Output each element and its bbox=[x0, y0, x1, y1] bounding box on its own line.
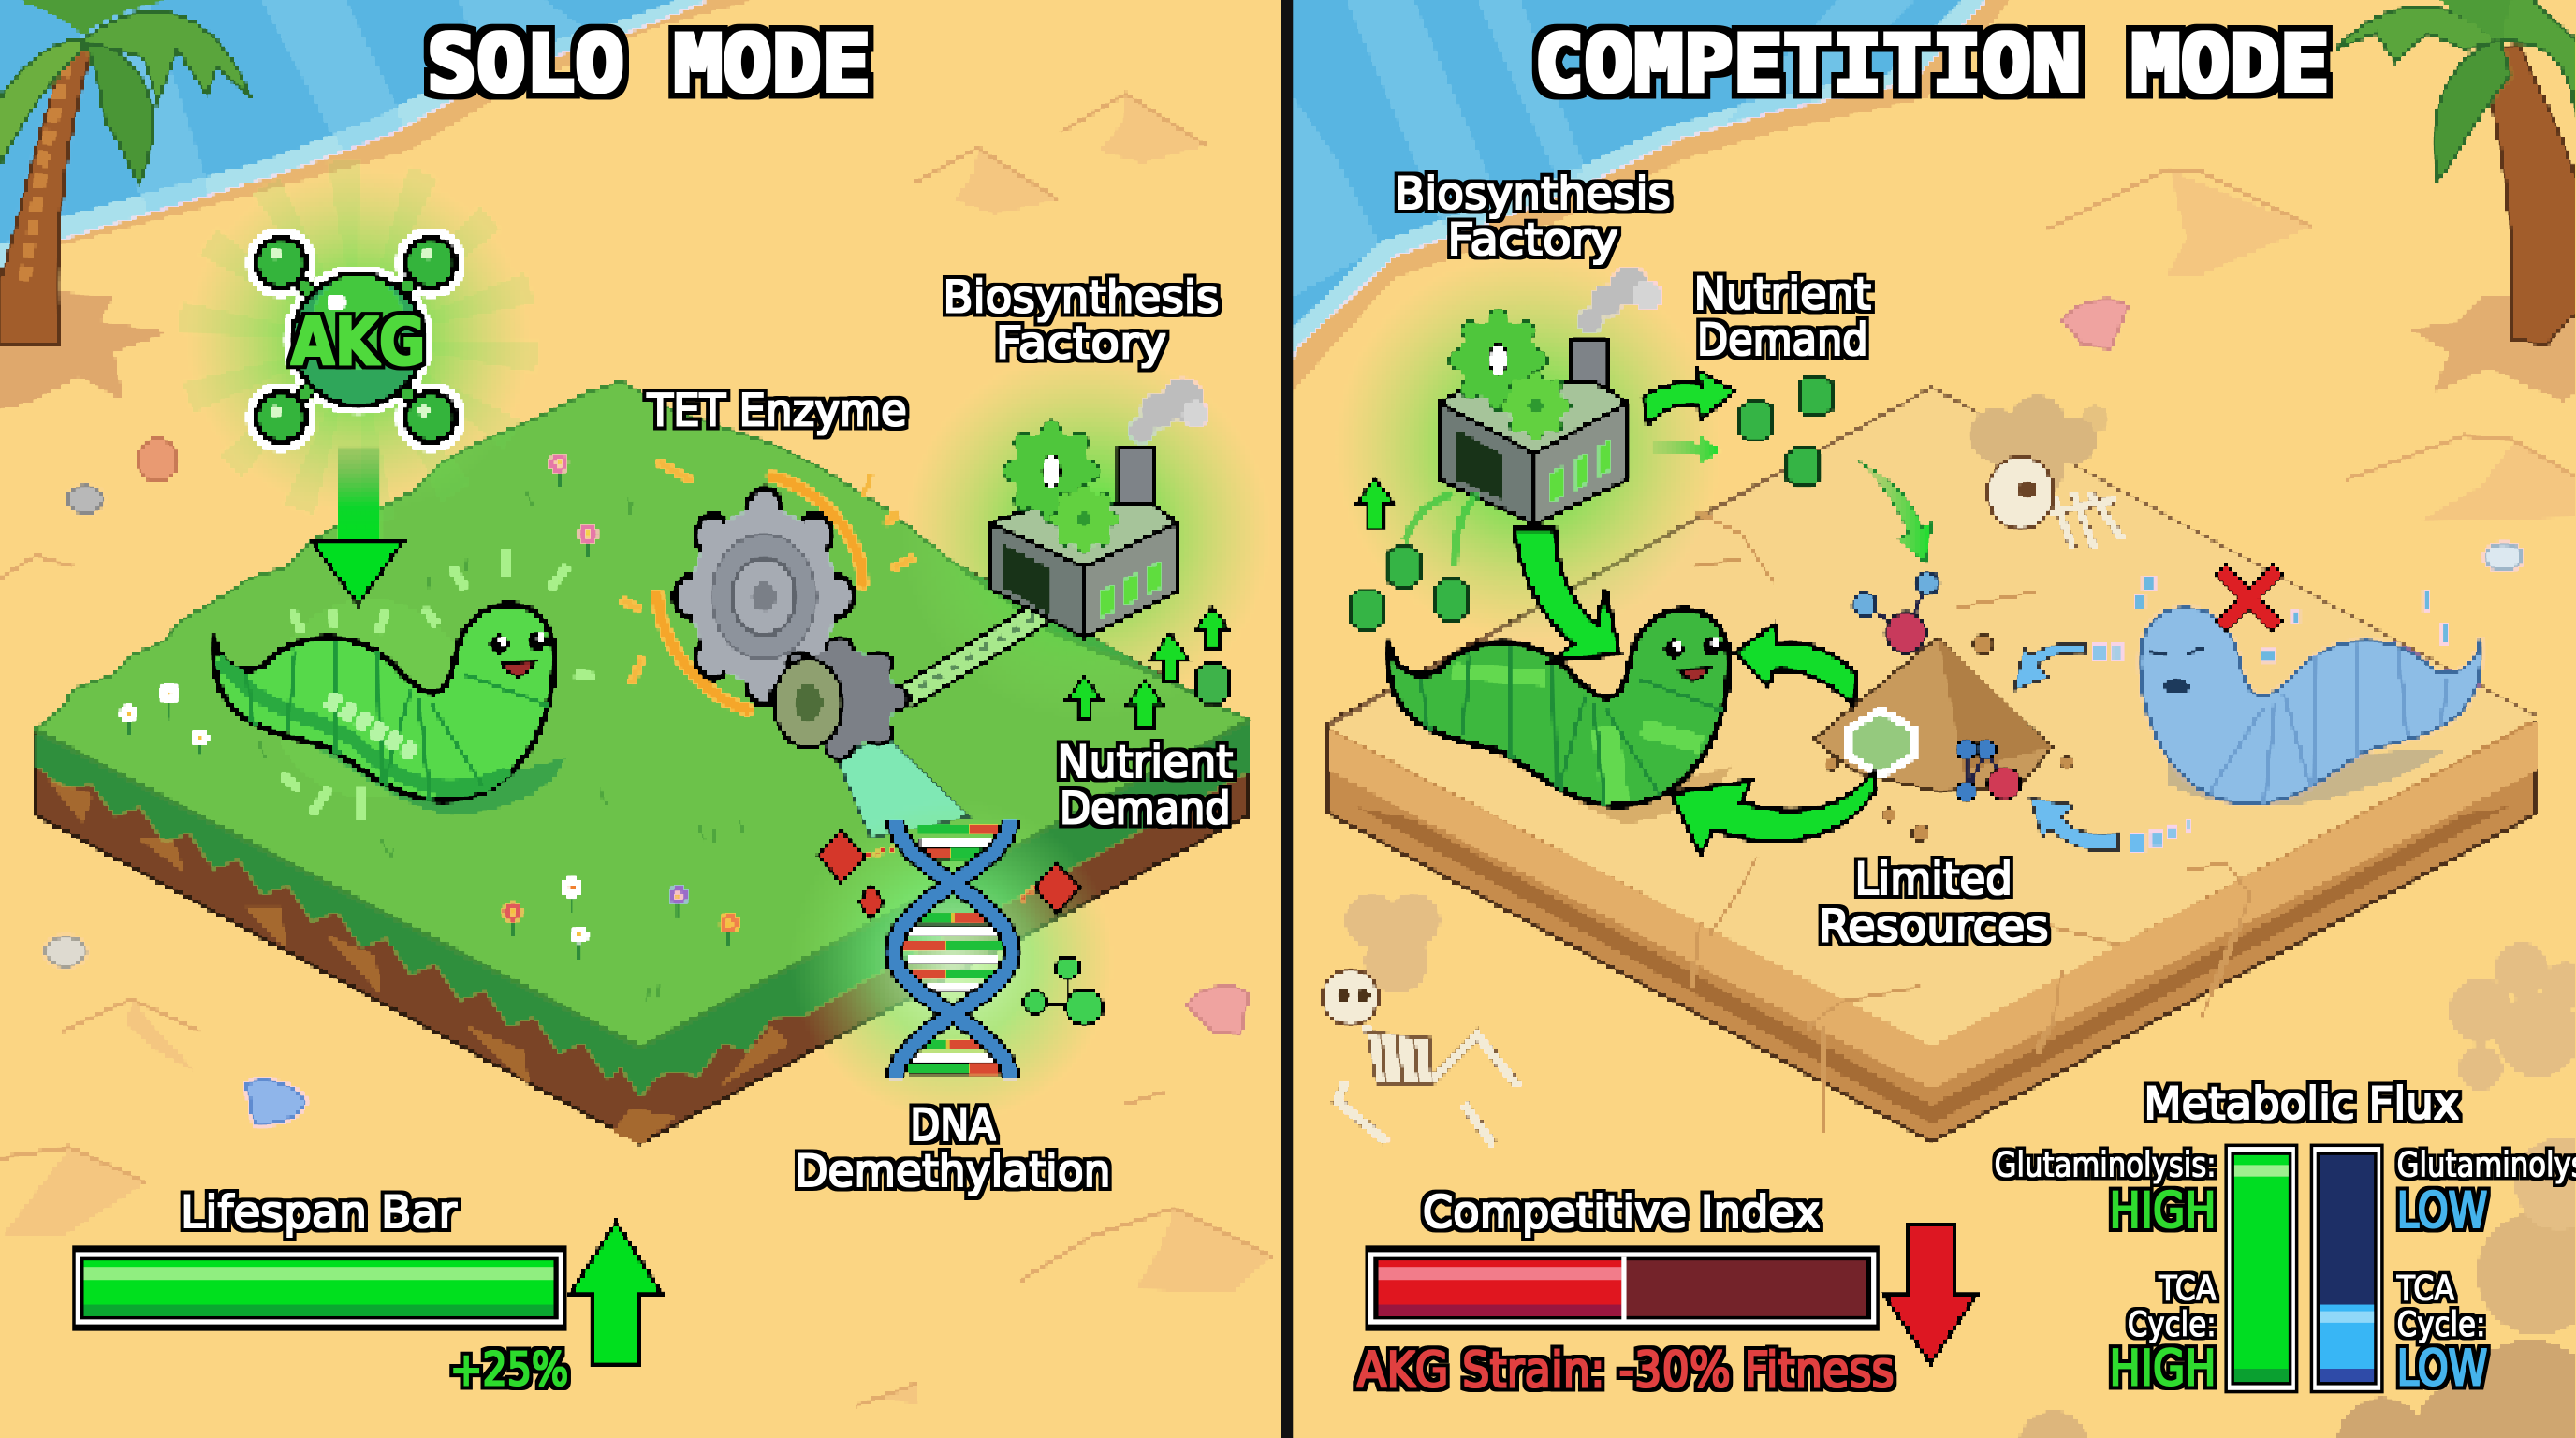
X mark bbox=[2226, 575, 2272, 621]
palm shadow, right bbox=[2407, 296, 2576, 403]
weak blue worm bbox=[2140, 608, 2481, 809]
label: nutrient demand bbox=[1057, 737, 1233, 834]
rib cage bbox=[1367, 1032, 1432, 1084]
AKG glow bbox=[185, 168, 531, 513]
dust clouds, background bbox=[1344, 892, 2576, 1091]
isometric grass platform bbox=[37, 381, 1249, 1144]
face bbox=[1663, 635, 1722, 680]
label: lifespan bar: Lifespan Bar bbox=[181, 1187, 457, 1239]
gears on roof bbox=[1449, 309, 1571, 441]
panel: competition mode scene bbox=[1293, 0, 2576, 1438]
beach and sea, left bbox=[0, 0, 759, 287]
arrow: competitive index down bbox=[1882, 1225, 1978, 1364]
base pair rungs bbox=[903, 825, 1003, 1075]
skull with dust cloud bbox=[1969, 394, 2123, 549]
label: nutrient demand: Demand bbox=[1060, 783, 1231, 834]
palm tree, left bbox=[0, 0, 252, 345]
flux labels: right column bbox=[2396, 1145, 2576, 1398]
sand dunes, left bbox=[0, 94, 1273, 1406]
label: nutrient demand, right bbox=[1694, 269, 1871, 366]
divider bbox=[1281, 0, 1293, 1438]
title: solo mode: SOLO MODE bbox=[427, 20, 871, 110]
flux labels: right column: LOW bbox=[2397, 1182, 2487, 1240]
competing green worm bbox=[1387, 609, 1729, 810]
worm shadow bbox=[246, 723, 567, 816]
worm face bbox=[489, 630, 548, 676]
flux labels: left column: HIGH bbox=[2110, 1341, 2217, 1398]
lifespan bar bbox=[72, 1245, 567, 1331]
sparkle rays around worm bbox=[283, 550, 594, 818]
green gears bbox=[1003, 420, 1119, 554]
icon: DNA helix bbox=[792, 800, 1114, 1123]
title: competition mode: COMPETITION MODE bbox=[1534, 20, 2330, 110]
arrow: lifespan up bbox=[570, 1223, 662, 1364]
sand dunes, right bbox=[2045, 169, 2576, 522]
label: nutrient demand, right: Nutrient bbox=[1694, 269, 1871, 320]
label: DNA demethylation: Demethylation bbox=[795, 1146, 1110, 1197]
label: biosynthesis factory: Biosynthesis bbox=[943, 271, 1219, 323]
metabolic flux: high bar bbox=[2224, 1144, 2298, 1393]
label: nutrient demand: Nutrient bbox=[1057, 737, 1233, 788]
pale green crystal bbox=[1848, 710, 1914, 775]
molecule: lower red-blue bbox=[1956, 740, 2021, 801]
worm shadow, right bbox=[1412, 723, 1734, 825]
rib bones bbox=[2050, 493, 2123, 549]
methyl groups bbox=[818, 829, 1081, 920]
molecule: upper red-blue bbox=[1853, 572, 1939, 653]
flowers bbox=[120, 453, 739, 960]
label: biosynthesis factory: Factory bbox=[996, 318, 1166, 370]
label: biosynthesis factory bbox=[943, 271, 1219, 370]
arrow: blue dashed upper bbox=[2014, 644, 2123, 690]
label: competitive index: Competitive Index bbox=[1423, 1187, 1821, 1239]
smoke bbox=[1129, 378, 1209, 444]
palm tree shadow bbox=[0, 287, 172, 411]
nutrient arrows and crystal, left bbox=[1066, 607, 1229, 729]
crystal arrows around factory bbox=[1355, 370, 1932, 567]
panel: solo mode scene bbox=[0, 0, 1273, 1406]
arrow: AKG down to worm bbox=[312, 447, 402, 605]
healthy green worm bbox=[212, 600, 554, 805]
icon: biosynthesis factory bbox=[989, 378, 1209, 638]
label: limited resources bbox=[1819, 854, 2049, 953]
label: metabolic flux: Metabolic Flux bbox=[2144, 1078, 2459, 1130]
label: nutrient demand, right: Demand bbox=[1697, 315, 1868, 366]
arrow: factory to worm bbox=[1515, 529, 1620, 661]
tube from factory bbox=[903, 605, 1055, 698]
icon: TET enzyme gear bbox=[674, 489, 909, 759]
icon: AKG molecule bbox=[246, 228, 465, 452]
competitive index bar bbox=[1365, 1245, 1880, 1331]
icon: factory, right bbox=[1439, 266, 1662, 524]
percent label: +25% bbox=[450, 1343, 568, 1397]
label: biosynthesis factory, right: Biosynthesis bbox=[1395, 169, 1671, 220]
cracks bbox=[1692, 509, 2250, 1134]
palm tree, right bbox=[2336, 0, 2576, 345]
arrow: resource to worm body bbox=[1671, 772, 1876, 855]
label: DNA demethylation: DNA bbox=[910, 1100, 996, 1152]
flux labels: right column: TCA bbox=[2396, 1268, 2454, 1308]
flux labels: left column: HIGH bbox=[2110, 1182, 2217, 1240]
arrow: resource to worm head bbox=[1734, 624, 1856, 707]
dust bottom right bbox=[2017, 1137, 2576, 1438]
flux labels: left column bbox=[1995, 1145, 2217, 1398]
label: limited resources: Resources bbox=[1819, 902, 2049, 953]
beach and sea, right bbox=[1293, 0, 2012, 394]
arrow: blue dashed lower bbox=[2030, 799, 2191, 851]
flux labels: left column: Glutaminolysis: bbox=[1995, 1145, 2217, 1185]
label: TET enzyme: TET Enzyme bbox=[647, 386, 907, 437]
factory glow, right bbox=[1334, 253, 1721, 640]
label: DNA demethylation bbox=[795, 1100, 1110, 1197]
metabolic flux: low bar bbox=[2310, 1144, 2384, 1393]
pebbles and shells, left bbox=[46, 439, 1249, 1124]
flux labels: right column: LOW bbox=[2397, 1341, 2487, 1398]
pink shell and pebble, right bbox=[2062, 300, 2522, 570]
AKG molecule label: AKG bbox=[291, 304, 426, 381]
flux labels: left column: TCA bbox=[2158, 1268, 2217, 1308]
sparks bbox=[624, 463, 912, 710]
skeleton on sand bbox=[1323, 970, 1518, 1145]
label: biosynthesis factory, right: Factory bbox=[1447, 214, 1618, 266]
fitness label: AKG Strain: -30% Fitness bbox=[1357, 1342, 1895, 1399]
teal beam bbox=[835, 740, 970, 838]
cracked sand platform bbox=[1329, 388, 2537, 1142]
sweat drops bbox=[2136, 575, 2448, 662]
sad face bbox=[2149, 648, 2204, 694]
small molecule bbox=[1023, 956, 1103, 1025]
factory glow bbox=[903, 350, 1271, 718]
nutrient crystals bbox=[1351, 376, 1832, 629]
flux labels: left column: Cycle: bbox=[2128, 1304, 2217, 1344]
label: biosynthesis factory, right bbox=[1395, 169, 1671, 266]
label: limited resources: Limited bbox=[1855, 854, 2012, 905]
worm shadow, blue bbox=[2169, 748, 2448, 807]
limited resources pile bbox=[1814, 634, 2073, 842]
flux labels: right column: Cycle: bbox=[2397, 1304, 2485, 1344]
